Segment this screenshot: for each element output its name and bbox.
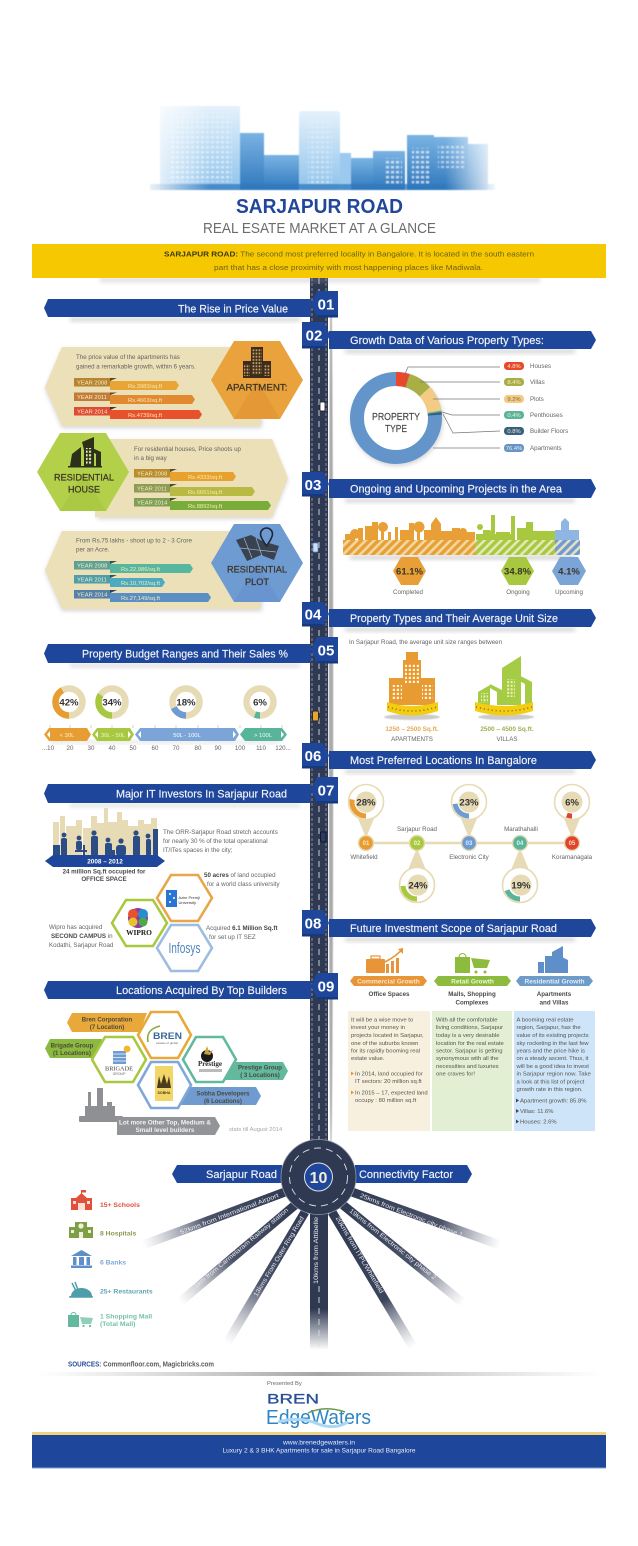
- location: Koramanagala: Koramanagala: [552, 854, 593, 861]
- callouts: IT investors: Acquired 6.1 Million Sq.ft: [206, 925, 278, 932]
- project percentage hexagons: 4.1%: [558, 566, 580, 578]
- logo: Prestige: Prestige: [198, 1059, 223, 1068]
- section 06 heading: [302, 743, 596, 773]
- text: ORR stretch: The ORR-Sarjapur Road stretch accounts: [163, 829, 278, 836]
- logo: Bren EdgeWaters: BREN: [267, 1390, 319, 1406]
- icon: villas unit size: VILLAS: [497, 736, 517, 743]
- column: retail growth: today is a very desirable: [436, 1033, 500, 1039]
- section 08 heading: 08: [305, 916, 321, 932]
- icon: house hexagon: HOUSE: [68, 484, 100, 496]
- icon: briefcase and growth chart: [366, 948, 403, 973]
- builder tags: Brigade Group: [51, 1042, 94, 1050]
- car icon: [320, 402, 325, 411]
- radial roads: 13kms From Outer Ring Road: [253, 1215, 306, 1298]
- budget range scale: 70: [173, 745, 180, 752]
- year bars: apartment: YEAR 2008: [77, 380, 107, 386]
- builder hexagons: [92, 1012, 236, 1108]
- budget range scale: ...10: [42, 745, 55, 752]
- budget range scale: 60: [152, 745, 159, 752]
- hexagon: Azim Premji University: [157, 875, 212, 921]
- donut legend: 4.8%: [507, 364, 521, 370]
- section 01 heading: [44, 291, 338, 321]
- section 05 heading: Property Budget Ranges and Their Sales %: [82, 648, 288, 660]
- column: residential growth: growth rate in this region.: [516, 1087, 583, 1093]
- car icon: [313, 543, 318, 552]
- donut legend: Apartments: [530, 445, 562, 452]
- main road: [310, 278, 333, 1158]
- location: Sarjapur Road: [397, 826, 438, 902]
- section 03 heading: [302, 472, 596, 502]
- icon: house hexagon: [37, 433, 129, 511]
- icon: apartments unit size: 1250 – 2500 Sq.ft.: [385, 726, 439, 733]
- column: commercial growth: Office Spaces: [369, 991, 410, 998]
- column: retail growth: Complexes: [455, 1000, 489, 1006]
- section 05 heading: [44, 637, 338, 667]
- budget range scale: 90: [215, 745, 222, 752]
- hexagon: Wipro: [112, 900, 167, 946]
- roundabout with number 10: 10: [310, 1170, 328, 1187]
- footer divider shadow: [40, 1372, 600, 1376]
- investors silhouette banner: [45, 808, 165, 883]
- column: residential growth: a look at this list of project: [516, 1080, 585, 1086]
- budget range scale: 30: [88, 745, 95, 752]
- section 04 heading: 04: [305, 606, 322, 624]
- budget ring charts: 6%: [253, 698, 267, 708]
- builder tags: (1 Locations): [53, 1050, 91, 1057]
- section 02 heading: Growth Data of Various Property Types:: [350, 335, 544, 347]
- section 04 heading: Property Types and Their Average Unit Size: [350, 613, 558, 625]
- donut chart: property type: PROPERTY: [372, 412, 420, 423]
- icon: schools: 15+ Schools: [100, 1202, 140, 1209]
- radial roads: 25kms from Electronic city phase 1: [359, 1192, 464, 1239]
- icon: plot hexagon: [211, 524, 303, 602]
- location: Electronic City: 23%: [459, 798, 479, 808]
- section 03 heading: Ongoing and Upcoming Projects in the Area: [350, 484, 563, 496]
- panel: apartment prices: gained a remarkable growth, within 6 years.: [76, 364, 196, 370]
- donut legend: Villas: [530, 379, 545, 386]
- column: commercial growth: IT sectors: 20 million sq.ft: [355, 1079, 422, 1085]
- icon: plot hexagon: RESIDENTIAL: [227, 564, 288, 576]
- radial roads: [143, 1192, 500, 1350]
- projects skyline chart: [343, 515, 580, 559]
- donut legend: Plots: [530, 396, 544, 403]
- car icon: [312, 711, 318, 721]
- location: Electronic City: 03: [466, 841, 473, 847]
- logo: Brigade: [92, 1037, 146, 1082]
- logo: Brigade: GROUP: [113, 1072, 126, 1076]
- radial roads: 19kms from Electronic city phase 2: [348, 1208, 438, 1282]
- builder tags: [45, 1013, 288, 1105]
- budget range scale: 30L - 50L: [101, 733, 126, 739]
- column: residential growth: Apartments: [537, 991, 572, 998]
- icon: plot hexagon: PLOT: [245, 577, 269, 588]
- builder tags: Sobha Developers: [196, 1090, 250, 1098]
- column: commercial growth: In 2014, land occupied for: [355, 1072, 423, 1078]
- hexagon: Wipro: WIPRO: [126, 928, 152, 937]
- column: residential growth: Houses: 2.6%: [520, 1120, 557, 1126]
- location: Marathahalli: [502, 826, 538, 902]
- column: retail growth: Retail Growth: [451, 978, 494, 986]
- column: residential growth: Villas: 11.6%: [520, 1109, 554, 1115]
- section 01 heading: 01: [318, 296, 334, 314]
- budget ring charts: [56, 688, 274, 716]
- budget range scale: < 30L: [60, 733, 75, 739]
- column: commercial growth: for its rapidly booming real: [351, 1048, 420, 1054]
- column: commercial growth: one of the suburbs known: [351, 1041, 418, 1047]
- column: residential growth: sky rocketing in the last few: [516, 1041, 589, 1047]
- column: retail growth: necessities and luxuries: [436, 1064, 499, 1070]
- location: Electronic City: [449, 784, 490, 861]
- project percentage hexagons: Completed: [393, 589, 424, 596]
- footer band: www.brenedgewaters.in: [282, 1440, 356, 1446]
- donut legend: Builder Floors: [530, 428, 568, 435]
- section 07 heading: [44, 777, 338, 807]
- icon: banks: 6 Banks: [100, 1260, 126, 1266]
- intro band: SARJAPUR ROAD: The second most preferred locality in Bangalore. It is located in the south eastern: [164, 250, 534, 258]
- location: Whitefield: 01: [363, 841, 370, 847]
- icon: shopping mall: 1 Shopping Mall: [100, 1314, 152, 1320]
- panel: residential house prices: [37, 433, 288, 519]
- budget range scale: > 100L: [254, 733, 273, 739]
- logo: Bren EdgeWaters: EdgeWaters: [266, 1406, 371, 1429]
- column: retail growth: synonymous with all the: [436, 1056, 499, 1062]
- title: SARJAPUR ROAD: [236, 196, 403, 218]
- logo: Sobha: SOBHA: [158, 1091, 171, 1095]
- year bars: apartment: [74, 378, 202, 419]
- title: [203, 196, 436, 237]
- investors silhouette banner: OFFICE SPACE: [81, 876, 127, 883]
- text: ORR stretch: [163, 829, 278, 854]
- icon: shopping mall: (Total Mall): [100, 1321, 135, 1328]
- section 02 heading: [302, 322, 596, 353]
- other builders tag: [79, 1088, 283, 1135]
- icon: apartment hexagon: APARTMENT:: [226, 382, 288, 394]
- donut legend: 9.2%: [507, 397, 521, 403]
- year bars: plot: YEAR 2014: [77, 592, 108, 598]
- location: Koramanagala: [552, 784, 593, 861]
- callouts: IT investors: for a world class university: [207, 881, 280, 888]
- budget ring charts: 42%: [59, 698, 79, 708]
- radial roads: 52kms from International Airport: [179, 1192, 280, 1236]
- section 08 heading: Future Investment Scope of Sarjapur Road: [350, 923, 557, 935]
- icon: villas unit size: 2500 – 4500 Sq.ft.: [480, 726, 534, 733]
- project percentage hexagons: Upcoming: [555, 589, 583, 596]
- section 09 heading: 09: [318, 978, 334, 996]
- text: ORR stretch: IT/ITes spaces in the city;: [163, 847, 233, 854]
- location: Marathahalli: 04: [517, 841, 524, 847]
- radial roads: 10kms from Attibelle: [313, 1216, 320, 1284]
- column: residential growth: years and the price hike is: [516, 1048, 585, 1054]
- section 04 heading: [302, 602, 596, 631]
- icon: blue towers: [538, 946, 568, 973]
- callouts: IT investors: Wipro has acquired: [49, 924, 103, 931]
- icon: house hexagon: RESIDENTIAL: [54, 472, 115, 484]
- column: commercial growth: projects located in Sarjapur,: [351, 1033, 424, 1039]
- column: commercial growth: occupy : 80 million sq.ft: [355, 1098, 417, 1104]
- panel: residential house prices: in a big way: [134, 455, 168, 462]
- section 09 heading: [44, 973, 338, 1000]
- section 08 heading: [302, 910, 596, 941]
- donut legend: 76.4%: [506, 446, 522, 452]
- callouts: IT investors: Kodathi, Sarjapur Road: [49, 942, 114, 949]
- other builders tag: stats till August 2014: [229, 1127, 283, 1133]
- builder tags: ( 3 Locations): [240, 1072, 280, 1079]
- column: retail growth: sector. Sarjapur is getting: [436, 1048, 502, 1054]
- donut chart: property type: [350, 372, 443, 466]
- budget ring charts: 34%: [102, 698, 122, 708]
- logo: Bren EdgeWaters: [266, 1390, 371, 1429]
- column: retail growth: location for the real estate: [436, 1041, 505, 1047]
- amenity list: [68, 1190, 153, 1328]
- year bars: plot: [74, 561, 211, 602]
- donut legend: 0.4%: [507, 413, 521, 419]
- sources: SOURCES: Commonfloor.com, Magicbricks.com: [68, 1362, 214, 1368]
- text: ORR stretch: for nearly 30 % of the total operational: [163, 838, 268, 845]
- column: residential growth: Apartment growth: 85.8%: [520, 1098, 587, 1104]
- section 06 heading: Most Preferred Locations In Bangalore: [350, 755, 537, 767]
- year bars: apartment: Rs.4663/sq.ft: [128, 398, 163, 404]
- radial roads: 20kms from ITPL/Whitefield: [334, 1215, 385, 1295]
- unit size intro text: In Sarjapur Road, the average unit size ranges between: [349, 639, 503, 646]
- year bars: house: Rs.6651/sq.ft: [188, 490, 223, 496]
- donut chart: property type: TYPE: [385, 424, 407, 435]
- icon: restaurants: 25+ Restaurants: [100, 1288, 153, 1296]
- logo: Bren: estates of global: [156, 1041, 178, 1045]
- budget range scale: 50L - 100L: [173, 733, 202, 739]
- budget range scale: 110: [256, 745, 266, 752]
- project percentage hexagons: 61.1%: [396, 566, 424, 578]
- location: Whitefield: [348, 784, 384, 861]
- section 07 heading: 07: [318, 782, 334, 800]
- donut legend: 0.8%: [507, 429, 521, 435]
- investors silhouette banner: 2008 – 2012: [87, 858, 123, 866]
- icon: apartments unit size: [384, 652, 440, 743]
- icon: hospitals: 8 Hospitals: [100, 1230, 136, 1238]
- location: Koramanagala: 05: [569, 841, 576, 847]
- builder tags: Bren Corporation: [82, 1016, 132, 1024]
- footer band: [32, 1432, 606, 1468]
- location: Koramanagala: 6%: [565, 798, 579, 808]
- column: residential growth: value of its existing projects: [516, 1033, 589, 1039]
- hexagon: Infosys: [157, 925, 212, 971]
- icon: shopping mall: [68, 1312, 152, 1328]
- column: retail growth: one craves for!: [436, 1072, 475, 1078]
- location: Whitefield: 28%: [356, 798, 376, 808]
- panel: residential plot prices: [45, 524, 303, 611]
- hexagon: Infosys: Infosys: [168, 941, 200, 957]
- hexagon: Azim Premji University: Azim Premji: [178, 895, 200, 900]
- column: retail growth: living conditions, Sarjapur: [436, 1025, 503, 1031]
- year bars: apartment: YEAR 2014: [77, 410, 108, 416]
- logo: Bren: BREN: [153, 1031, 182, 1042]
- column: residential growth: A booming real estate: [516, 1018, 574, 1024]
- investors silhouette banner: 24 million Sq.ft occupied for: [63, 868, 146, 876]
- panel: residential plot prices: From Rs.75 lakhs - shoot up to 2 - 3 Crore: [76, 538, 192, 544]
- year bars: apartment: Rs.4739/sq.ft: [128, 413, 163, 419]
- callouts: IT investors: SECOND CAMPUS in: [51, 933, 113, 940]
- section 07 heading: Major IT Investors In Sarjapur Road: [116, 788, 287, 800]
- footer band: Luxury 2 & 3 BHK Apartments for sale in Sarjapur Road Bangalore: [222, 1448, 416, 1454]
- logo: Sobha: [138, 1062, 191, 1108]
- year bars: house: YEAR 2014: [137, 500, 168, 506]
- budget range scale: 120...: [275, 745, 291, 752]
- location: Electronic City: Electronic City: [449, 854, 490, 861]
- year bars: house: Rs.4333/sq.ft: [188, 475, 223, 481]
- builder tags: (6 Locations): [204, 1098, 242, 1105]
- budget range scale: 20: [67, 745, 74, 752]
- column: retail growth: [432, 954, 512, 1131]
- column: commercial growth: Commercial Growth: [357, 978, 420, 986]
- column: commercial growth: [348, 948, 430, 1131]
- car icon: [320, 832, 326, 842]
- builder tags: (7 Location): [90, 1024, 124, 1031]
- column: residential growth: and Villas: [540, 1000, 569, 1006]
- column: retail growth: Malls, Shopping: [448, 991, 496, 998]
- section 06 heading: 06: [305, 748, 321, 765]
- section 05 heading: 05: [318, 642, 334, 660]
- column: retail growth: With all the comfortable: [436, 1018, 498, 1024]
- section 10 heading: right: [355, 1165, 472, 1183]
- panel: residential house prices: For residential houses, Price shoots up: [134, 446, 242, 453]
- icon: shopping bag and cart: [455, 954, 490, 974]
- section 10 heading: left: Sarjapur Road: [206, 1169, 277, 1181]
- section 02 heading: 02: [306, 328, 322, 344]
- location: Sarjapur Road: Sarjapur Road: [397, 826, 438, 833]
- budget range scale: 80: [195, 745, 202, 752]
- column: residential growth: Residential Growth: [524, 978, 585, 986]
- section 10 heading: left: [172, 1165, 282, 1183]
- budget ring charts: 18%: [176, 698, 196, 708]
- column: residential growth: [514, 946, 595, 1131]
- year bars: apartment: Rs.3983/sq.ft: [128, 384, 163, 390]
- other builders tag: Small level builders: [136, 1127, 195, 1134]
- callouts: IT investors: 50 acres of land occupied: [204, 872, 276, 879]
- callouts: IT investors: for set up IT SEZ: [209, 934, 256, 941]
- panel: residential plot prices: per an Acre.: [76, 546, 110, 554]
- logo: Bren: [138, 1012, 191, 1058]
- column: commercial growth: It will be a wise move to: [351, 1018, 414, 1024]
- icon: villas unit size: [475, 656, 534, 743]
- location: Whitefield: Whitefield: [350, 854, 378, 861]
- year bars: house: YEAR 2011: [137, 486, 167, 492]
- intro band: [32, 244, 606, 282]
- budget range scale: 100: [235, 745, 246, 752]
- column: commercial growth: estate value.: [351, 1056, 385, 1062]
- location pin timeline: [348, 784, 593, 902]
- section 09 heading: Locations Acquired By Top Builders: [116, 985, 287, 997]
- year bars: house: YEAR 2008: [137, 472, 167, 478]
- project percentage hexagons: Ongoing: [506, 589, 530, 596]
- donut legend: Penthouses: [530, 412, 563, 419]
- location: Sarjapur Road: 24%: [408, 880, 428, 892]
- icon: apartments unit size: APARTMENTS: [391, 736, 433, 743]
- location: Sarjapur Road: 02: [414, 841, 421, 847]
- column: residential growth: will be a good idea to invest: [516, 1064, 589, 1070]
- presented by: Presented By: [267, 1381, 302, 1387]
- radial roads: 1km from Carmelaram Railway station: [193, 1206, 290, 1290]
- column: residential growth: on a steady ascent. Thus, it: [516, 1056, 589, 1062]
- year bars: house: [134, 469, 271, 510]
- location: Marathahalli: Marathahalli: [504, 826, 538, 833]
- builder tags: Prestige Group: [238, 1064, 282, 1072]
- logo: Brigade: BRIGADE: [105, 1066, 133, 1072]
- budget range scale: [42, 725, 291, 752]
- panel: apartment prices: [45, 341, 303, 428]
- year bars: plot: YEAR 2008: [77, 564, 107, 570]
- year bars: house: Rs.8892/sq.ft: [188, 504, 223, 510]
- donut legend: Houses: [530, 363, 551, 370]
- budget range scale: 40: [109, 745, 116, 752]
- section 10 heading: right: Connectivity Factor: [359, 1169, 453, 1181]
- budget range scale: 50: [130, 745, 137, 752]
- other builders tag: Lot more Other Top, Medium &: [119, 1120, 211, 1126]
- panel: apartment prices: The price value of the apartments has: [76, 354, 180, 361]
- column: residential growth: region, Sarjapur, has the: [516, 1025, 581, 1031]
- year bars: plot: YEAR 2011: [77, 578, 107, 584]
- skyline header image: [140, 100, 500, 192]
- section 03 heading: 03: [305, 477, 321, 494]
- project percentage hexagons: 34.8%: [504, 566, 532, 578]
- location: Marathahalli: 19%: [511, 880, 531, 892]
- callouts: IT investors: [49, 872, 280, 949]
- year bars: plot: Rs.27,149/sq.ft: [121, 596, 160, 602]
- year bars: plot: Rs.22,986/sq.ft: [121, 567, 160, 573]
- year bars: apartment: YEAR 2011: [77, 395, 107, 401]
- column: commercial growth: invest your money in: [351, 1025, 405, 1031]
- project percentage hexagons: [393, 557, 586, 596]
- column: commercial growth: In 2015 – 17, expected land: [355, 1090, 428, 1096]
- roundabout with number 10: [281, 1140, 356, 1214]
- year bars: plot: Rs.10,702/sq.ft: [121, 581, 160, 587]
- logo: Prestige: [183, 1037, 236, 1082]
- section 01 heading: The Rise in Price Value: [178, 304, 288, 316]
- column: residential growth: in Sarjapur region now. Take: [516, 1072, 591, 1078]
- icon: apartment hexagon: [211, 341, 303, 419]
- hexagon: Azim Premji University: University: [178, 900, 196, 905]
- title: REAL ESATE MARKET AT A GLANCE: [203, 221, 436, 237]
- donut legend: [405, 362, 568, 452]
- intro band: part that has a close proximity with most happening places like Madiwala.: [214, 263, 483, 272]
- donut legend: 8.4%: [507, 380, 521, 386]
